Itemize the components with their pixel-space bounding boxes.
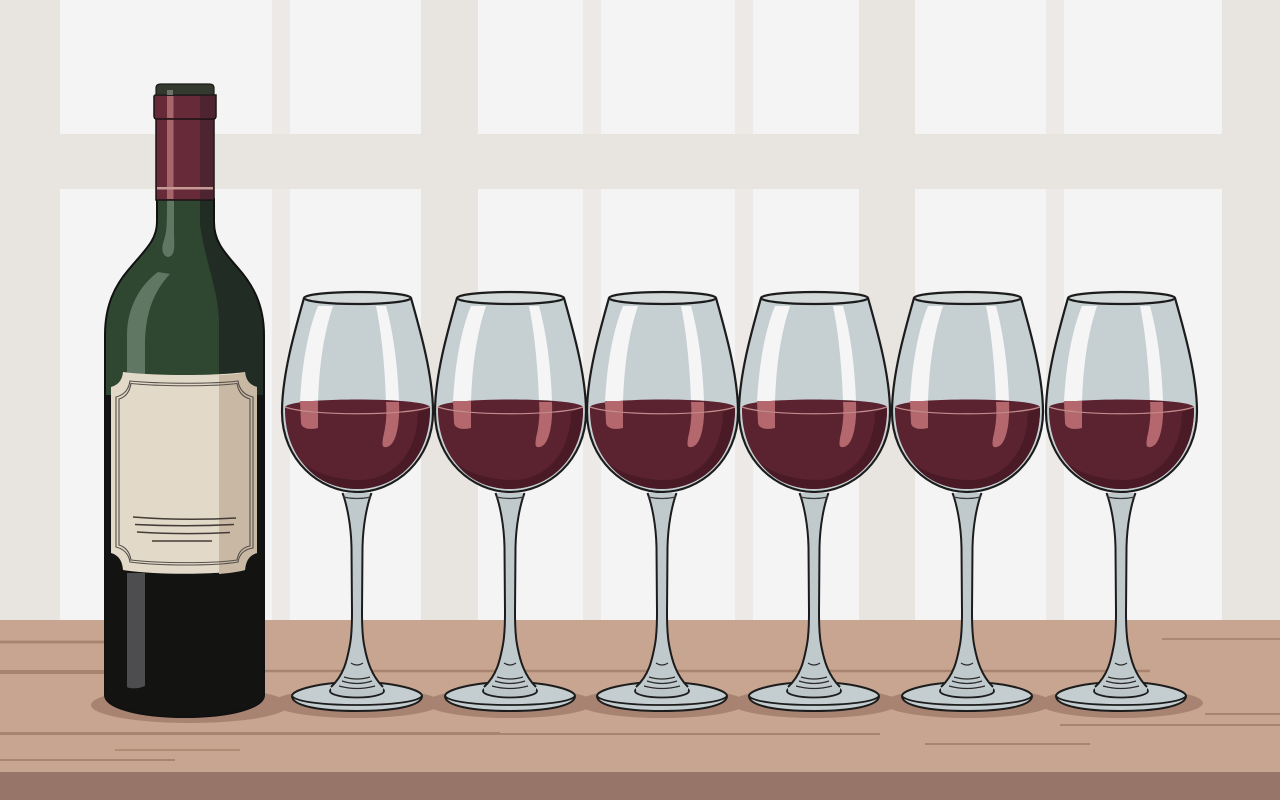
- label text lines: [133, 517, 236, 541]
- wine glass 6: [1046, 292, 1197, 711]
- wooden table: [0, 620, 1280, 800]
- bottle body: [105, 198, 264, 717]
- wine glass 5: [892, 292, 1043, 711]
- capsule: [156, 118, 214, 200]
- wine bottle: [105, 84, 264, 717]
- table shadow: [91, 687, 1203, 723]
- wine glass 4: [739, 292, 890, 711]
- bottle cap top: [156, 84, 214, 95]
- bottle highlights: [127, 272, 170, 375]
- wine glass 1: [282, 292, 433, 711]
- wine glass 2: [435, 292, 586, 711]
- bottle label: [111, 372, 257, 574]
- wall background: [0, 0, 1280, 630]
- lighter window mullions: [272, 0, 1064, 621]
- wine glass 3: [587, 292, 738, 711]
- window panes: [60, 0, 1222, 621]
